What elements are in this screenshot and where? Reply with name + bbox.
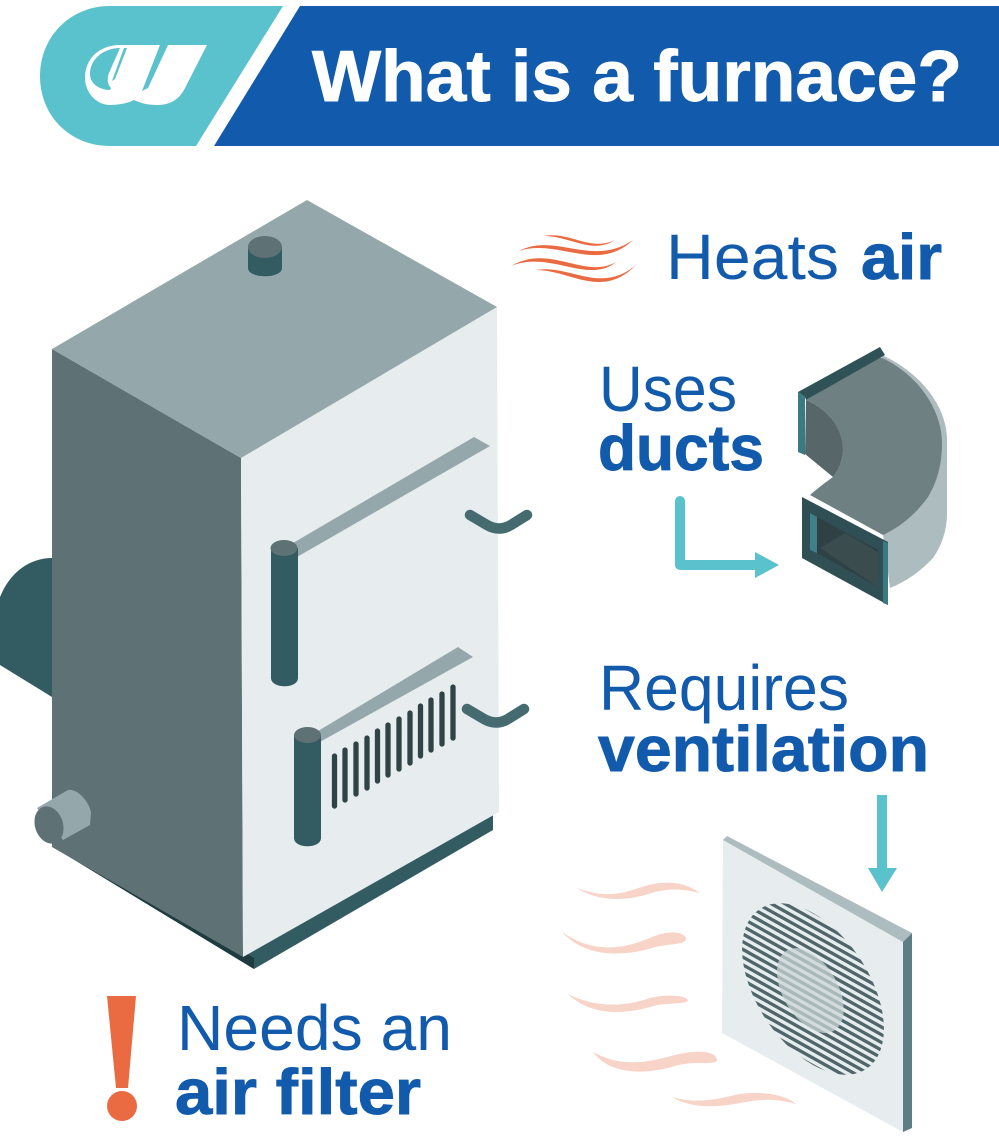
duct inner [805, 400, 843, 477]
title: What is a furnace? [312, 37, 962, 117]
wall vent illustration [722, 836, 912, 1132]
uses ducts label [598, 353, 764, 484]
logo badge [40, 6, 283, 146]
upper flange [798, 347, 885, 400]
upper hook [470, 515, 527, 528]
upper door bar [293, 437, 490, 557]
vent slots [334, 687, 453, 806]
upper handle [270, 540, 298, 686]
side pipe [30, 790, 91, 847]
needs an air filter label [175, 992, 452, 1128]
needs an air filter label: air filter [175, 1056, 421, 1128]
duct illustration [798, 347, 947, 605]
uses ducts label: Uses [599, 353, 737, 425]
arrow to duct [680, 501, 779, 578]
uses ducts label: ducts [598, 412, 764, 484]
top cap [248, 236, 282, 276]
logo mark [85, 45, 207, 105]
header banner [40, 6, 999, 146]
title bar [214, 6, 999, 146]
airflow lines [562, 883, 796, 1106]
furnace illustration [0, 200, 527, 969]
requires ventilation label: Requires [599, 652, 849, 724]
duct outer wall [882, 355, 947, 588]
lower door bar [318, 647, 473, 743]
heat waves icon [511, 235, 636, 282]
arrow to vent [868, 795, 897, 892]
lower hook [467, 709, 524, 722]
exclamation icon [107, 996, 137, 1121]
heats air label: Heats [666, 221, 839, 293]
requires ventilation label: ventilation [598, 713, 929, 785]
furnace base [63, 815, 493, 969]
vent louvres [742, 903, 884, 1075]
needs an air filter label: Needs an [177, 992, 452, 1064]
vent plate [722, 838, 903, 1132]
top face [52, 200, 497, 458]
rear exhaust [0, 558, 52, 697]
front panel [241, 307, 499, 957]
lower flange [802, 497, 888, 605]
lower handle [294, 727, 321, 846]
duct top [806, 357, 942, 535]
vent grille [742, 903, 884, 1075]
left side [52, 349, 243, 957]
requires ventilation label [598, 652, 929, 785]
vent hub [777, 948, 844, 1033]
heats air label: air [861, 221, 942, 293]
